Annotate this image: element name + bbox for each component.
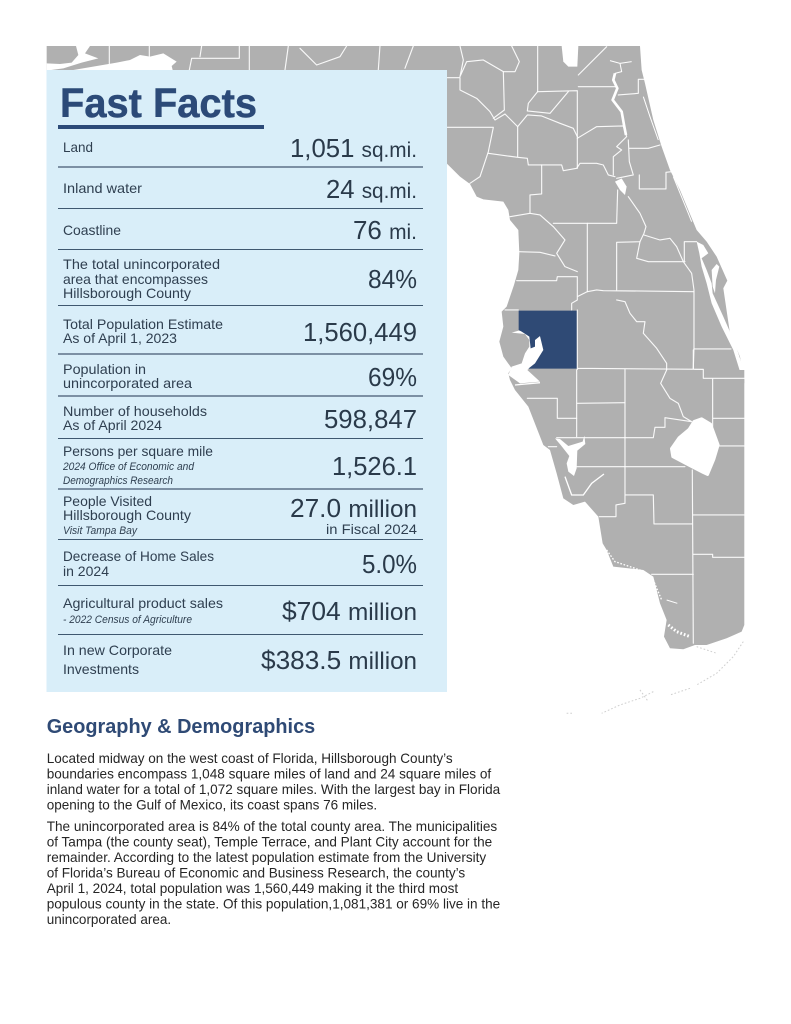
Ten Thousand Islands and Cape Sable specks [607,550,662,600]
row: home sales: in 2024 [63,563,109,579]
row: people visited: 27.0 million [290,493,417,523]
row: unincorporated area: area that encompasses [63,271,208,287]
row: total population: As of April 1, 2023 [63,330,177,346]
row: unincorporated area [58,256,423,306]
row: households [58,403,423,438]
row: corporate investments: $383.5 million [261,645,417,675]
text block: paragraph 2: of Tampa (the county seat), Temple Terrace, and Plant City account for the [47,834,492,850]
row: coastline: 76 mi. [353,215,417,245]
row: agricultural sales: Agricultural product sales [63,595,223,611]
row: agricultural sales [58,595,423,634]
text block: paragraph 2: April 1, 2024, total population was 1,560,449 making it the third most [47,881,458,896]
row: total population [58,316,423,354]
row: population in unincorporated area: Population in [63,361,146,377]
row: land [58,133,423,167]
row: people visited [58,493,423,540]
Lake Okeechobee [671,419,718,475]
title: Fast Facts [60,80,257,126]
row: unincorporated area: Hillsborough County [63,285,191,301]
row: coastline: Coastline [63,222,121,238]
heading: Geography & Demographics: Geography & Demographics [47,715,315,738]
row: inland water [58,174,423,208]
row: people visited: People Visited [63,493,152,509]
row: households: 598,847 [324,404,417,434]
row: households: As of April 2024 [63,417,162,433]
row: total population: 1,560,449 [303,317,417,347]
row: persons per square mile [58,443,423,489]
text block: paragraph 1: opening to the Gulf of Mexico, its coast spans 76 miles. [47,798,377,812]
Indian River lagoon [697,242,743,377]
text block: paragraph 1: Located midway on the west coast of Florida, Hillsborough County’s [47,751,453,766]
row: total population: Total Population Estimate [63,316,223,332]
row: unincorporated area: 84% [368,264,417,294]
text block: paragraph 2: The unincorporated area is 84% of the total county area. The municipalities [47,819,497,834]
map: Florida counties [47,46,744,713]
row: coastline [58,215,423,250]
text block: paragraph 2: of Florida’s Bureau of Economic and Business Research, the county’s [47,866,465,880]
row: home sales: Decrease of Home Sales [63,548,214,564]
Cedar Key coastal specks [475,200,517,252]
row: corporate investments: In new Corporate [63,642,172,658]
row: inland water: 24 sq.mi. [326,174,417,204]
text block: paragraph 1: inland water for a total of 1,072 square miles. With the largest bay in Florida [47,782,501,797]
row: land: 1,051 sq.mi. [290,133,417,163]
row: people visited: Visit Tampa Bay [63,525,138,537]
row: corporate investments: Investments [63,661,139,677]
text block: paragraph 2: populous county in the state. Of this population,1,081,381 or 69% live in the [47,896,500,912]
row: population in unincorporated area: 69% [368,362,417,392]
Charlotte Harbor [555,436,585,476]
text block: paragraph 2 [47,819,500,927]
county highlight: Hillsborough [519,311,577,369]
row: home sales: 5.0% [362,549,417,579]
row: population in unincorporated area: unincorporated area [63,375,192,391]
row: persons per square mile: Persons per square mile [63,443,213,459]
north and central Florida land [440,46,744,383]
row: agricultural sales: $704 million [282,596,417,626]
row: people visited: Hillsborough County [63,507,191,523]
row: persons per square mile: Demographics Research [63,475,173,487]
row: unincorporated area: The total unincorporated [63,256,220,272]
south Florida land [508,370,744,713]
text block: paragraph 2: remainder. According to the latest population estimate from the University [47,850,486,865]
row: households: Number of households [63,403,207,419]
row: land: Land [63,139,93,155]
text block: paragraph 1 [47,751,501,812]
Florida Keys [567,642,743,713]
row: persons per square mile: 2024 Office of Economic and [62,461,195,473]
text block: paragraph 1: boundaries encompass 1,048 square miles of land and 24 square miles of [47,766,491,782]
panhandle strip [47,46,452,73]
panel: Fast Facts [46,70,447,692]
row: persons per square mile: 1,526.1 [332,451,417,481]
row: inland water: Inland water [63,180,142,196]
row: agricultural sales: - 2022 Census of Agriculture [63,614,192,626]
text block: paragraph 2: unincorporated area. [47,912,171,927]
row: corporate investments [63,642,417,677]
row: people visited: in Fiscal 2024 [326,521,417,537]
Tampa Bay and Pinellas [508,311,577,383]
row: population in unincorporated area [58,361,423,396]
row: home sales [58,548,423,586]
